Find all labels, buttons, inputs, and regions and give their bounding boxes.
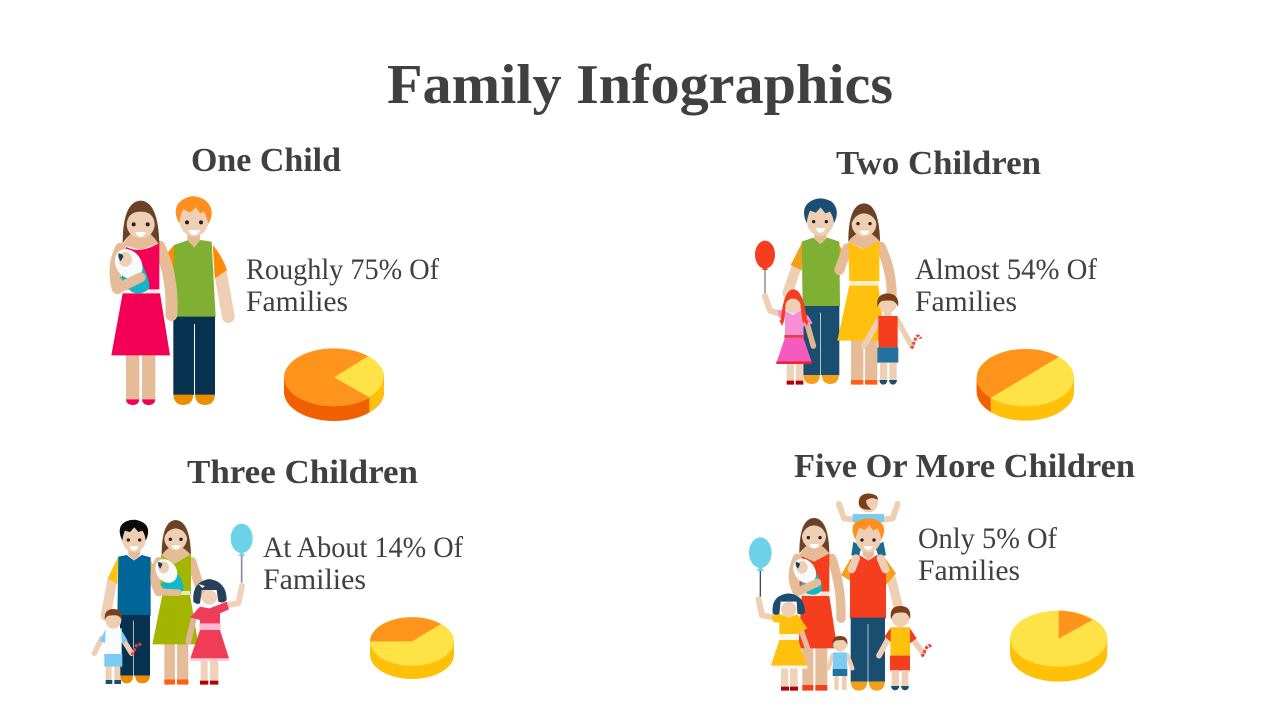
text: roughly 75%: Families (246, 285, 348, 318)
heading: three children: Three Children (187, 454, 418, 491)
illustration: family with two children (755, 198, 921, 385)
heading: two children: Two Children (836, 145, 1041, 182)
text: at about 14%: Families (263, 563, 366, 596)
text: only 5%: Families (918, 554, 1020, 587)
illustration: couple with baby (109, 196, 228, 405)
text: roughly 75% (246, 253, 439, 318)
illustration: family with three children (94, 520, 253, 685)
text: at about 14%: At About 14% Of (263, 531, 463, 564)
pie chart: 75% (284, 348, 384, 421)
pie chart: 5% (1010, 611, 1107, 682)
panel: five or more children (749, 448, 1135, 691)
pie chart: 14% (370, 617, 454, 679)
panel: three children (94, 454, 463, 685)
heading: one child: One Child (191, 142, 341, 179)
heading: five or more children: Five Or More Children (794, 448, 1135, 485)
text: only 5%: Only 5% Of (918, 522, 1057, 555)
panel: one child (109, 142, 439, 421)
panel: two children (755, 145, 1097, 421)
illustration: family with five children (749, 493, 931, 691)
title: Family Infographics (387, 54, 893, 116)
text: roughly 75%: Roughly 75% Of (246, 253, 439, 286)
text: only 5% (918, 522, 1057, 587)
text: at about 14% (263, 531, 463, 596)
text: almost 54%: Almost 54% Of (915, 253, 1097, 286)
pie chart: 54% (976, 349, 1074, 421)
text: almost 54%: Families (915, 285, 1017, 318)
text: almost 54% (915, 253, 1097, 318)
